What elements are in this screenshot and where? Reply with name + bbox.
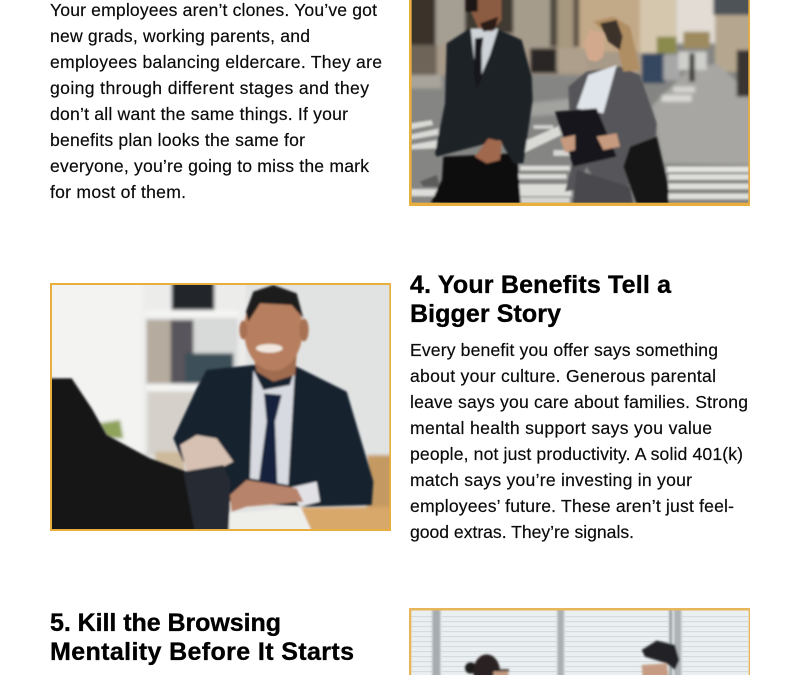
text block: benefits culture paragraph: about your culture. Generous parental [410, 366, 716, 386]
text block: benefits culture paragraph: people, not just productivity. A solid 401(k) [410, 444, 743, 464]
suit [173, 365, 373, 507]
heading: section 4: 4. Your Benefits Tell a [410, 271, 672, 299]
photo: smiling man shaking hands across a desk [50, 283, 391, 531]
text block: employee stages paragraph: going through different stages and they [50, 78, 369, 98]
text block: employee stages paragraph: employees balancing eldercare. They are [50, 52, 382, 72]
text block: benefits culture paragraph: Every benefit you offer says something [410, 340, 718, 360]
text block: employee stages paragraph [50, 0, 382, 202]
text block: benefits culture paragraph: mental health support says you value [410, 418, 712, 438]
heading: section 5: Mentality Before It Starts [50, 638, 354, 666]
text block: employee stages paragraph: don’t all want the same things. If your [50, 104, 348, 124]
heading: section 5 [50, 609, 354, 666]
text block: benefits culture paragraph: leave says you care about families. Strong [410, 392, 748, 412]
text block: employee stages paragraph: benefits plan looks the same for [50, 130, 305, 150]
photo: two colleagues walking across a city street [400, 0, 755, 213]
foreground person [52, 376, 230, 529]
photo: two colleagues by a window with blinds [409, 608, 750, 675]
text block: benefits culture paragraph [410, 340, 748, 542]
text block: employee stages paragraph: everyone, you’re going to miss the mark [50, 156, 369, 176]
heading: section 4 [410, 271, 672, 328]
text block: employee stages paragraph: new grads, working parents, and [50, 26, 310, 46]
heading: section 4: Bigger Story [410, 300, 561, 328]
woman [565, 67, 657, 192]
text block: benefits culture paragraph: good extras. They’re signals. [410, 522, 634, 542]
heading: section 5: 5. Kill the Browsing [50, 609, 281, 637]
text block: employee stages paragraph: Your employees aren’t clones. You’ve got [50, 0, 377, 20]
text block: employee stages paragraph: for most of them. [50, 182, 186, 202]
text block: benefits culture paragraph: match says you’re investing in your [410, 470, 692, 490]
man [440, 152, 522, 203]
head [253, 355, 297, 382]
text block: benefits culture paragraph: employees’ future. These aren’t just feel- [410, 496, 734, 516]
